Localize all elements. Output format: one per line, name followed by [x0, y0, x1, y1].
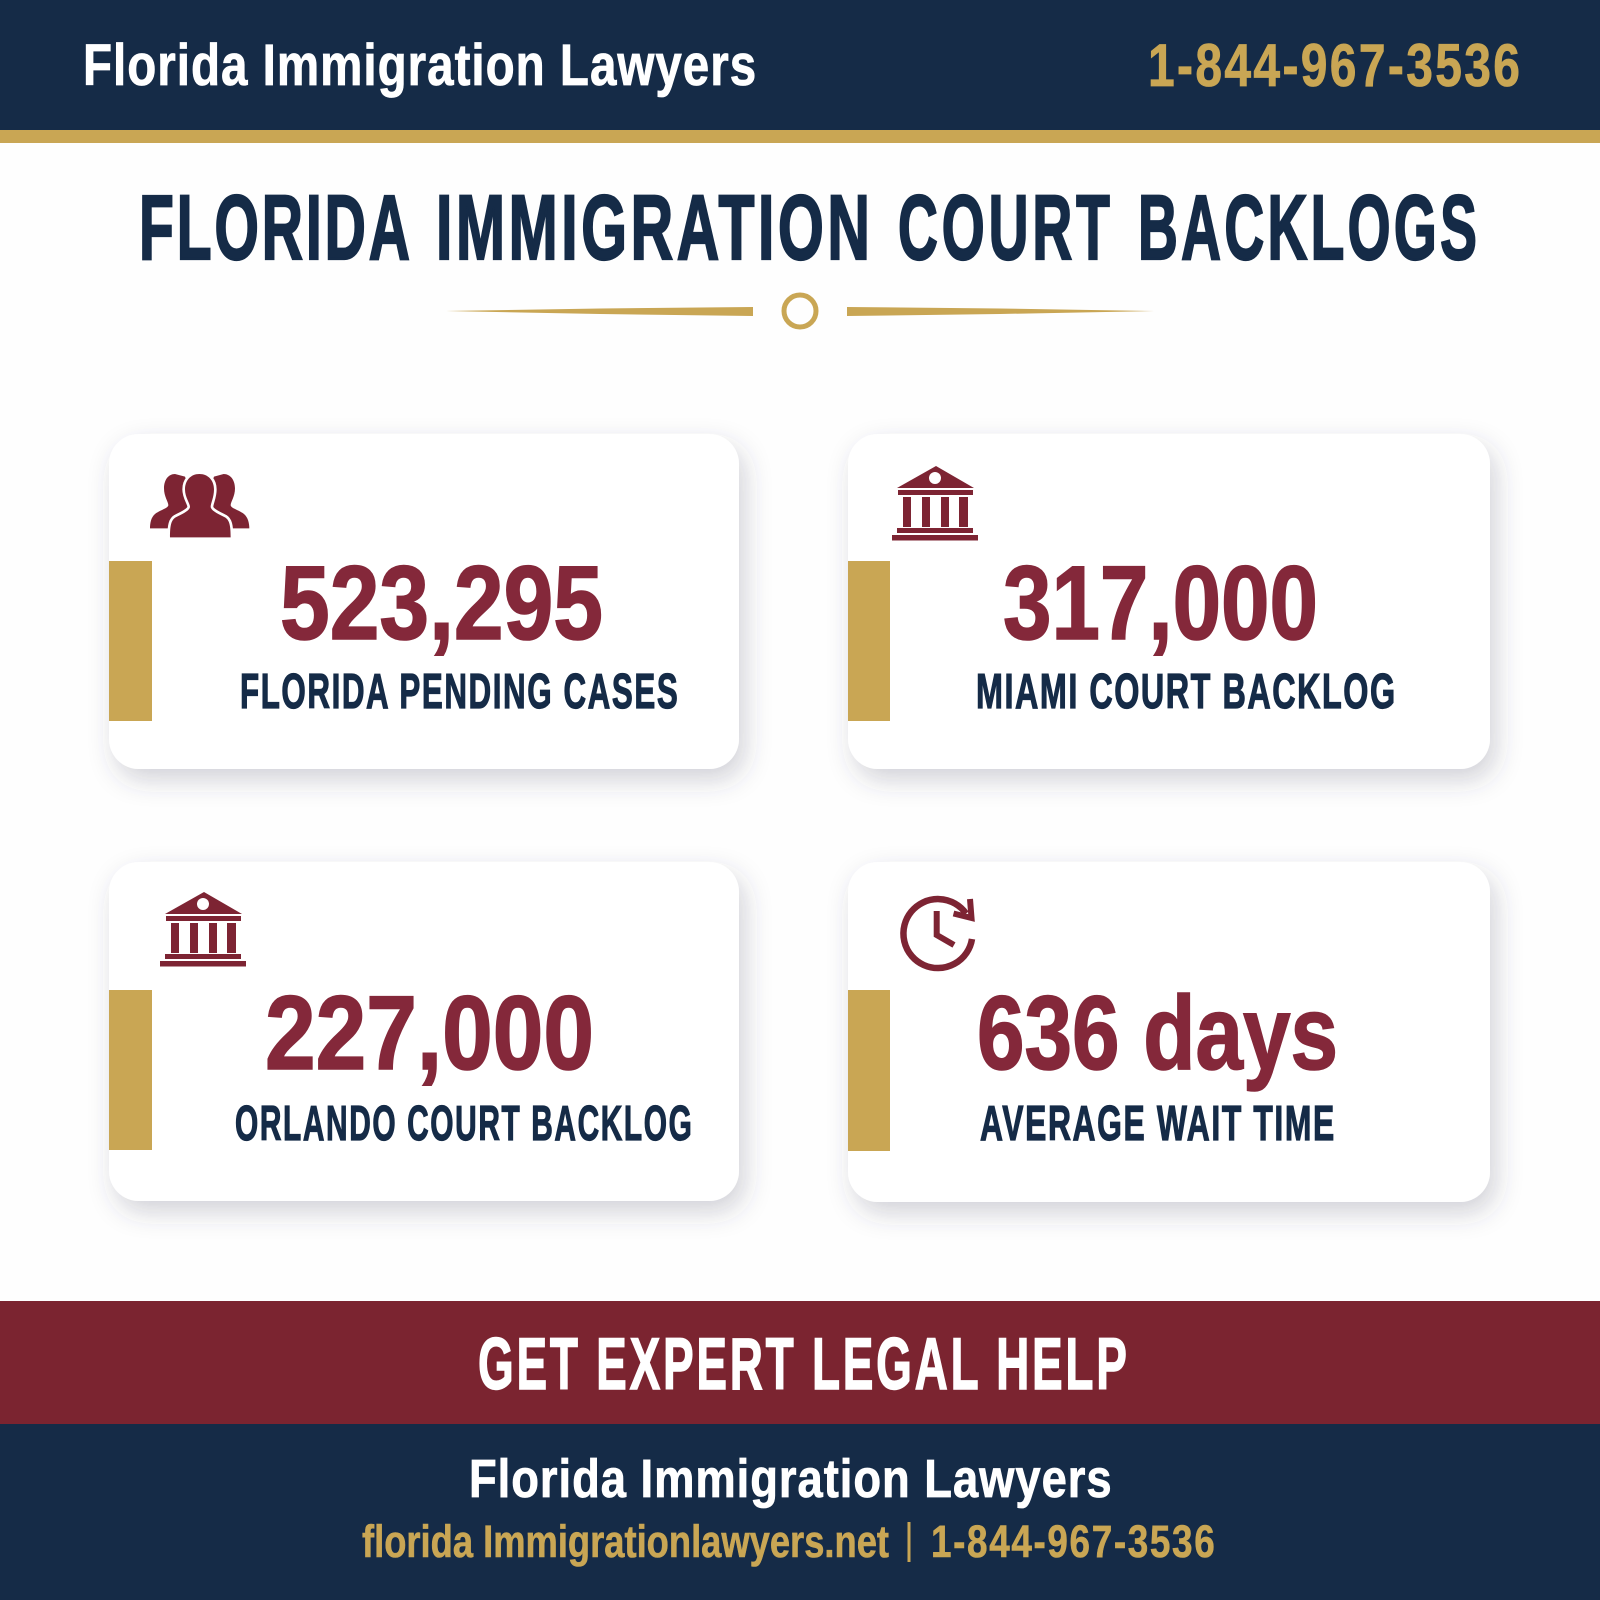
call-to-action banner: GET EXPERT LEGAL HELP: [478, 1323, 1127, 1405]
title: [139, 177, 1477, 280]
panel: Florida pending cases: [109, 434, 739, 769]
label: ORLANDO COURT BACKLOG: [235, 1095, 692, 1151]
icon: clock with arrow: [903, 899, 972, 968]
value: 636 days: [977, 975, 1338, 1092]
title: COURT: [898, 177, 1110, 280]
phone number: 1-844-967-3536: [1148, 32, 1520, 99]
title: FLORIDA: [139, 177, 410, 279]
icon: courthouse: [160, 892, 246, 966]
value: 227,000: [265, 975, 594, 1092]
title: IMMIGRATION: [436, 177, 870, 279]
footer website: florida Immigrationlawyers.net: [362, 1516, 889, 1567]
icon: courthouse: [892, 466, 978, 540]
title: BACKLOGS: [1138, 177, 1477, 280]
label: MIAMI COURT BACKLOG: [976, 663, 1395, 719]
label: AVERAGE WAIT TIME: [980, 1096, 1334, 1151]
footer: [0, 1424, 1600, 1600]
value: 317,000: [1003, 545, 1318, 662]
panel: Orlando court backlog: [109, 862, 739, 1201]
title ornament: [446, 295, 1154, 327]
value: 523,295: [280, 545, 603, 662]
icon: people: [150, 474, 249, 537]
firm name: Florida Immigration Lawyers: [83, 34, 756, 98]
call-to-action banner: [0, 1301, 1600, 1424]
footer firm name: Florida Immigration Lawyers: [469, 1448, 1112, 1509]
panel: Miami court backlog: [848, 434, 1490, 769]
header bar: [0, 0, 1600, 143]
panel: average wait time: [848, 862, 1490, 1202]
label: FLORIDA PENDING CASES: [240, 664, 678, 719]
footer phone: 1-844-967-3536: [931, 1517, 1215, 1567]
